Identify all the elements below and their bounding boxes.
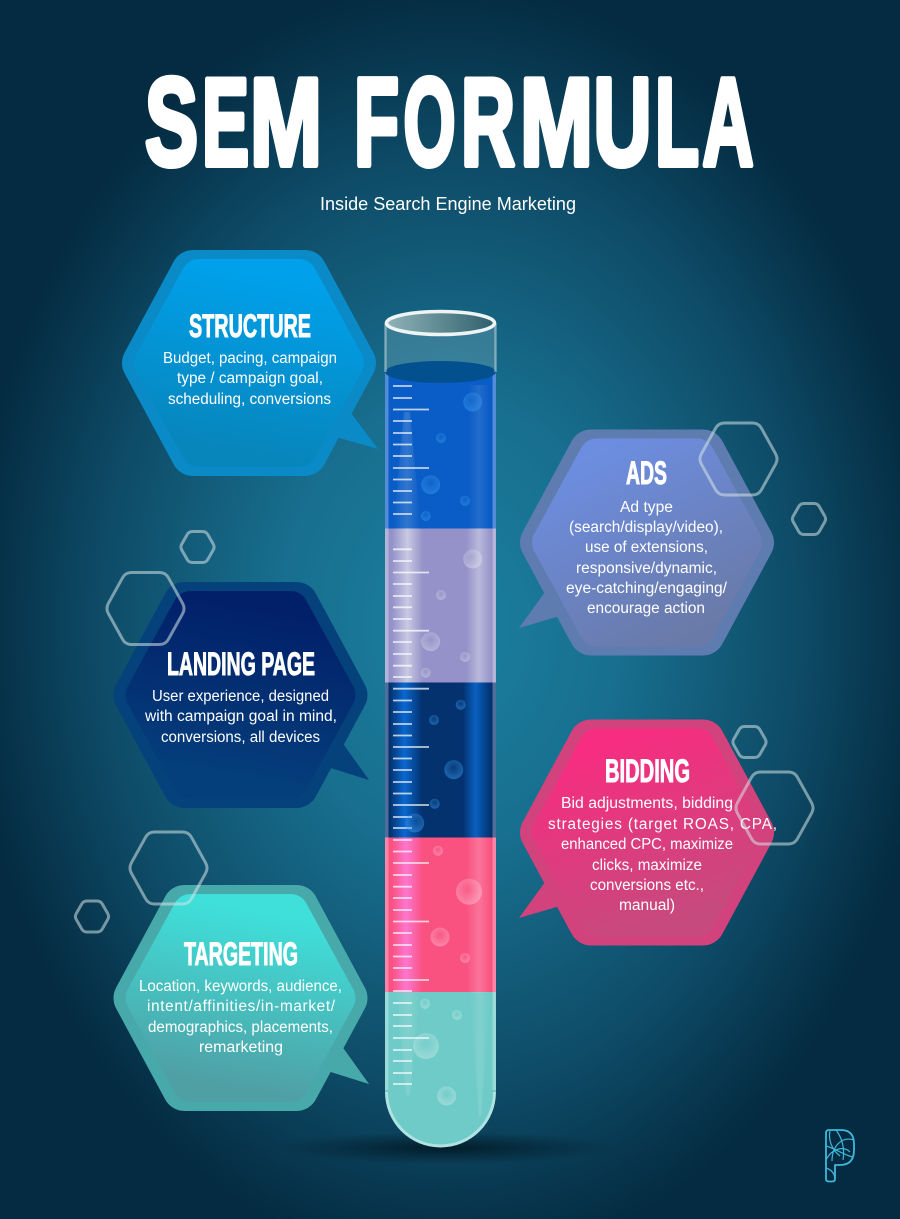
heading: ADS bbox=[626, 455, 667, 491]
description: (search/display/video), bbox=[569, 519, 723, 536]
title: E bbox=[202, 54, 249, 192]
description bbox=[163, 350, 337, 408]
heading: TARGETING bbox=[184, 936, 298, 972]
panel: bidding bbox=[519, 742, 777, 924]
description bbox=[139, 978, 342, 1056]
title: M bbox=[520, 54, 593, 192]
test tube bbox=[385, 312, 496, 1160]
panel: ads bbox=[519, 452, 752, 634]
description: Ad type bbox=[620, 499, 673, 516]
description: conversions, all devices bbox=[161, 729, 320, 746]
panel: targeting bbox=[136, 907, 369, 1089]
description: Location, keywords, audience, bbox=[139, 978, 342, 995]
glass walls bbox=[386, 323, 496, 372]
heading: BIDDING bbox=[605, 753, 690, 789]
description: encourage action bbox=[587, 600, 705, 617]
bubbles bbox=[405, 392, 482, 1106]
description: demographics, placements, bbox=[148, 1019, 333, 1036]
decorative hexagon outlines bbox=[75, 423, 826, 932]
description: Bid adjustments, bidding bbox=[561, 795, 733, 812]
empty glass section bbox=[385, 323, 496, 380]
title: O bbox=[404, 54, 456, 192]
title bbox=[145, 54, 754, 192]
scale ticks bbox=[393, 386, 429, 1084]
subtitle: Inside Search Engine Marketing bbox=[320, 194, 576, 214]
description: remarketing bbox=[199, 1039, 283, 1056]
description bbox=[566, 499, 728, 617]
description bbox=[144, 688, 337, 746]
speech hexagon bbox=[519, 452, 752, 634]
description: clicks, maximize bbox=[592, 857, 702, 874]
description: scheduling, conversions bbox=[168, 391, 331, 408]
tube rim bbox=[386, 312, 494, 334]
speech hexagon bbox=[519, 742, 752, 924]
title: F bbox=[354, 54, 399, 192]
description: enhanced CPC, maximize bbox=[561, 836, 733, 853]
panel: landing page bbox=[136, 604, 369, 786]
description: conversions etc., bbox=[590, 877, 704, 894]
description bbox=[548, 795, 777, 914]
description: type / campaign goal, bbox=[177, 370, 323, 387]
panel: structure bbox=[144, 272, 378, 454]
description: use of extensions, bbox=[585, 539, 708, 556]
description: Budget, pacing, campaign bbox=[163, 350, 337, 367]
description: responsive/dynamic, bbox=[576, 560, 717, 577]
liquid surface bbox=[385, 361, 496, 383]
tube liquid layers bbox=[385, 360, 496, 1160]
description: with campaign goal in mind, bbox=[144, 708, 337, 725]
heading: LANDING PAGE bbox=[167, 646, 315, 682]
description: intent/affinities/in-market/ bbox=[147, 998, 336, 1015]
title: L bbox=[655, 54, 699, 192]
speech hexagon bbox=[136, 907, 369, 1089]
title: R bbox=[461, 54, 515, 192]
title: A bbox=[702, 54, 754, 192]
title: U bbox=[594, 54, 652, 192]
shadow under test tube bbox=[275, 1132, 615, 1164]
speech hexagon bbox=[136, 604, 369, 786]
title: M bbox=[250, 54, 322, 192]
speech hexagon bbox=[144, 272, 378, 454]
description: eye-catching/engaging/ bbox=[566, 580, 728, 597]
title: S bbox=[145, 54, 198, 192]
icon: brand logo P bbox=[826, 1130, 854, 1182]
description: strategies (target ROAS, CPA, bbox=[548, 816, 777, 833]
description: User experience, designed bbox=[152, 688, 329, 705]
heading: STRUCTURE bbox=[189, 308, 311, 344]
description: manual) bbox=[619, 897, 675, 914]
